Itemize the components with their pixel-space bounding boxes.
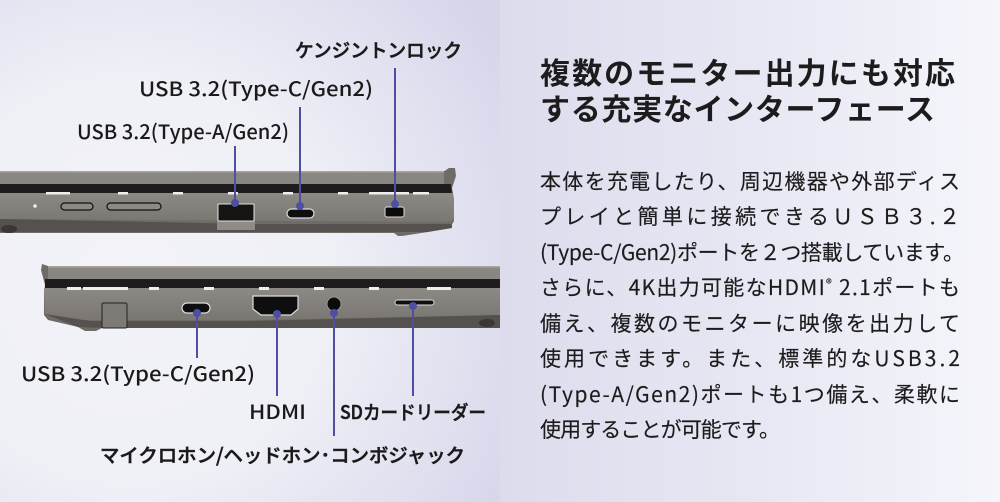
label: USB-A: USB 3.2(Type-A/Gen2): [77, 116, 289, 145]
body text: 本体を充電したり、周辺機器や外部ディス: [540, 166, 960, 196]
port labels: [21, 36, 486, 468]
icon: USB-C port: [182, 303, 210, 313]
label: Kensington lock: ケンジントンロック: [295, 36, 462, 63]
body text: ®: [826, 275, 832, 292]
icon: USB-A port: [217, 203, 255, 230]
label: SD card reader: SDカードリーダー: [340, 398, 486, 425]
icon: lock slot: [385, 207, 404, 217]
leader lines: [194, 68, 416, 436]
icon: HDMI port: [253, 296, 298, 315]
body text: 2.1ポートも: [833, 272, 960, 302]
title: する充実なインターフェース: [540, 85, 935, 129]
panel: right background: [500, 0, 1000, 502]
body text: 使用できます。また、標準的なUSB3.2: [540, 343, 960, 373]
body text: 備え、複数のモニターに映像を出力して: [540, 308, 960, 338]
body text: 使用することが可能です。: [540, 414, 780, 444]
icon: USB-C port: [287, 209, 314, 218]
icon: SD slot: [395, 300, 434, 305]
label: USB-C bottom: USB 3.2(Type-C/Gen2): [21, 358, 255, 387]
label: mic headphone combo jack: マイクロホン/ヘッドホン･コンボジャック: [100, 441, 465, 468]
icon: audio jack: [327, 297, 341, 311]
label: USB-C top: USB 3.2(Type-C/Gen2): [139, 73, 373, 102]
title: [540, 49, 955, 129]
body text: プレイと簡単に接続できるＵＳＢ３.２: [540, 201, 960, 231]
body text: (Type-C/Gen2)ポートを２つ搭載しています。: [540, 237, 964, 267]
laptop: lower side view: [41, 264, 500, 331]
body text: [540, 166, 964, 444]
laptop: upper side view: [0, 168, 456, 236]
panel: left background: [0, 0, 500, 502]
body text: (Type-A/Gen2)ポートも1つ備え、柔軟に: [540, 379, 960, 409]
body text: さらに、4K出力可能なHDMI: [540, 272, 825, 302]
label: HDMI: HDMI: [249, 396, 306, 425]
title: 複数のモニター出力にも対応: [540, 49, 955, 93]
